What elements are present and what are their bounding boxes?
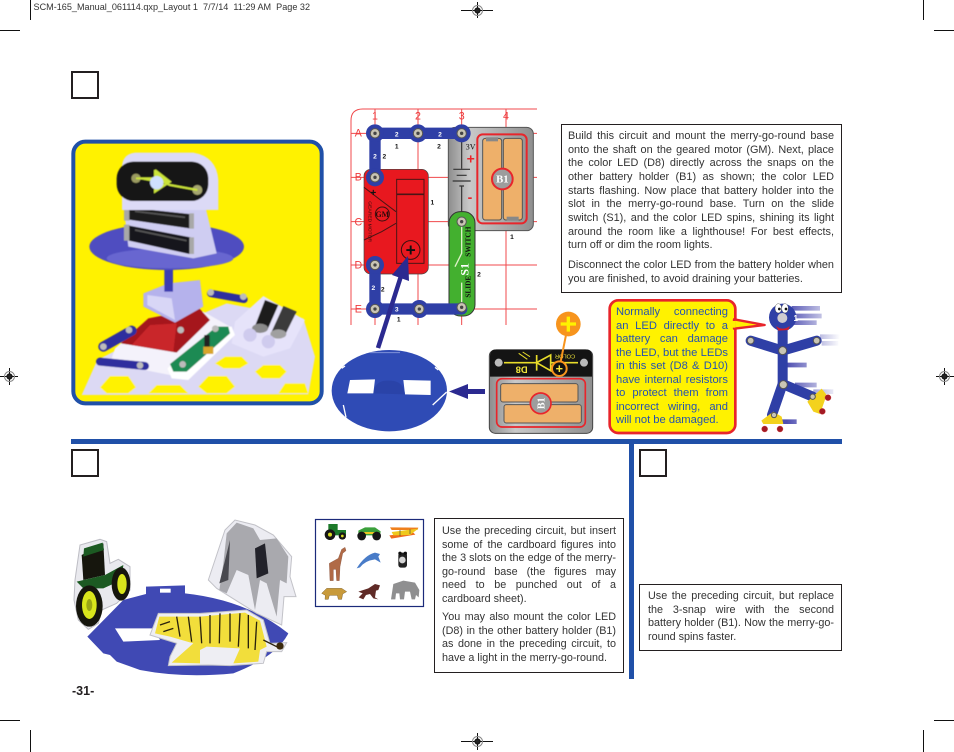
merry-go-round with figures photo bbox=[74, 520, 296, 675]
grid labels: 3 bbox=[459, 110, 465, 122]
grid bbox=[351, 109, 537, 325]
circuit diagram bbox=[351, 109, 537, 325]
grid labels: C bbox=[354, 216, 362, 228]
blue snap wires bbox=[100, 293, 244, 366]
geared motor GM: GM bbox=[375, 210, 390, 219]
callout text: LED note: have internal resistors bbox=[616, 374, 728, 386]
paragraph: insert figures: need to be punched out of a bbox=[442, 579, 616, 591]
LED module bbox=[122, 153, 218, 210]
biplane bbox=[389, 527, 418, 539]
blue base bbox=[87, 585, 288, 675]
callout text: LED note bbox=[616, 306, 728, 426]
paragraph: color LED option: have a light in the merry-go-round. bbox=[442, 652, 607, 664]
paragraph: build steps: switch (S1), and the color LED spins, shining its light bbox=[568, 212, 834, 224]
white snap base bbox=[110, 312, 230, 375]
slide switch S1 bbox=[449, 212, 475, 316]
wire and part numbers: 1 bbox=[395, 144, 399, 151]
wire and part numbers: 2 bbox=[395, 132, 399, 139]
LED on battery holder module: + bbox=[556, 362, 563, 376]
snaps bbox=[366, 124, 471, 318]
grid labels: 1 bbox=[372, 110, 378, 122]
mascot: Snappy: 1 bbox=[793, 314, 798, 323]
grid labels: 4 bbox=[503, 110, 509, 122]
paragraph: replace wire: round spins faster. bbox=[648, 631, 736, 643]
paragraph: color LED option: as done in the preceding circuit, to bbox=[442, 638, 616, 650]
paragraph: build steps: Build this circuit and mount the merry-go-round base bbox=[568, 130, 834, 142]
panel: assembled circuit photo bbox=[73, 142, 322, 403]
arrow: motor shaft to disc bbox=[378, 256, 409, 348]
callout text: LED note: to protect them from bbox=[616, 387, 728, 399]
text box: cardboard figures bbox=[434, 518, 624, 673]
shaft bbox=[164, 268, 173, 292]
wire and part numbers: 2 bbox=[382, 153, 386, 160]
top battery holder bbox=[122, 195, 217, 258]
panda bear bbox=[398, 552, 407, 568]
thumbnail: cardboard figures sheet bbox=[316, 520, 424, 606]
horse bbox=[358, 584, 380, 599]
section rule bbox=[71, 439, 842, 444]
page number: -31- bbox=[72, 684, 94, 698]
column divider bbox=[629, 444, 634, 679]
LED on battery holder module: B1 bbox=[536, 398, 547, 409]
geared motor GM bbox=[364, 169, 428, 274]
tiger figure bbox=[150, 610, 287, 666]
callout pointer and bubble bbox=[610, 300, 765, 433]
green slide switch bbox=[167, 327, 235, 380]
slide switch S1: SWITCH bbox=[464, 226, 473, 257]
callout text: LED note: an LED directly to a bbox=[616, 320, 728, 332]
paragraph: insert figures: the 3 slots on the edge of the merry- bbox=[442, 552, 616, 564]
geared motor GM: + bbox=[406, 240, 416, 260]
merry-go-round disc bbox=[89, 223, 244, 270]
wire and part numbers: 2 bbox=[437, 144, 441, 151]
experiment number box 1 bbox=[71, 71, 99, 99]
wire and part numbers: 2 bbox=[477, 272, 481, 279]
grid labels: D bbox=[354, 260, 362, 272]
paragraph: color LED option bbox=[442, 611, 616, 664]
small elephant bbox=[391, 581, 419, 599]
callout text: LED note: Normally connecting bbox=[616, 306, 728, 318]
paragraph: replace wire bbox=[648, 590, 834, 643]
callout text: LED note: the LED, but the LEDs bbox=[616, 346, 728, 358]
wire and part numbers: 2 bbox=[438, 132, 442, 139]
paragraph: build steps: onto the shaft on the geared motor (GM). Next, place bbox=[568, 144, 834, 156]
battery holder B1 bbox=[448, 127, 533, 231]
battery holder B1: - bbox=[468, 189, 473, 205]
paragraph: insert figures bbox=[442, 525, 616, 604]
paragraph: disconnect note: you are finished, to avoid draining your batteries. bbox=[568, 273, 803, 285]
wire and part numbers: 2 bbox=[373, 153, 377, 160]
hexagon base grid bbox=[82, 303, 315, 395]
snap wires bbox=[375, 133, 462, 309]
paragraph: insert figures: Use the preceding circuit, but insert bbox=[442, 525, 616, 537]
paragraph: build steps: turn off or dim the room lights. bbox=[568, 239, 712, 251]
grid labels: E bbox=[355, 304, 362, 316]
callout text: LED note: in this set (D8 & D10) bbox=[616, 360, 728, 372]
grid labels: 2 bbox=[415, 110, 421, 122]
paragraph: insert figures: some of the cardboard figures into bbox=[442, 538, 616, 550]
tractor figure bbox=[74, 539, 130, 629]
LED on battery holder module: COLOR bbox=[555, 352, 575, 358]
red geared motor bbox=[121, 308, 210, 353]
right battery holder bbox=[232, 296, 305, 357]
LED on battery holder module bbox=[489, 312, 593, 433]
gear box bbox=[143, 280, 203, 323]
wire and part numbers: 1 bbox=[430, 200, 434, 207]
paragraph: disconnect note: Disconnect the color LED from the battery holder when bbox=[568, 259, 834, 271]
mascot: Snappy bbox=[747, 304, 840, 432]
paragraph: color LED option: (D8) in the other battery holder (B1) bbox=[442, 624, 616, 636]
wire and part numbers: 3 bbox=[395, 306, 399, 313]
battery holder B1: 3V bbox=[466, 142, 476, 151]
wire and part numbers: 1 bbox=[397, 316, 401, 323]
callout text: LED note: incorrect wiring, and bbox=[616, 400, 728, 412]
battery holder B1: + bbox=[467, 150, 475, 166]
wire and part numbers: 2 bbox=[371, 285, 375, 292]
small tiger bbox=[322, 588, 347, 599]
paragraph: replace wire: battery holder (B1). Now the merry-go- bbox=[648, 617, 834, 629]
elephant figure bbox=[208, 520, 296, 625]
LED on battery holder module: D8 bbox=[516, 364, 528, 374]
text box: faster variation bbox=[639, 584, 842, 651]
paragraph: disconnect note bbox=[568, 259, 834, 285]
paragraph: build steps: slot in the merry-go-round base. Turn on the slide bbox=[568, 198, 834, 210]
geared motor GM: GEARED MOTOR bbox=[366, 201, 372, 243]
grid labels: A bbox=[355, 128, 363, 140]
giraffe bbox=[329, 547, 346, 581]
paragraph: build steps: other battery holder (B1) as shown; the color LED bbox=[568, 171, 834, 183]
paragraph: replace wire: the 3-snap wire with the second bbox=[648, 604, 834, 616]
paragraph: insert figures: cardboard sheet). bbox=[442, 592, 527, 604]
slide switch S1: SLIDE bbox=[464, 276, 473, 298]
wire and part numbers: 2 bbox=[381, 287, 385, 294]
print header slug: SCM-165_Manual_061114.qxp_Layout 1 7/7/14 11:29 AM Page 32 bbox=[34, 2, 310, 12]
arrow: module to disc bbox=[449, 384, 485, 399]
tractor bbox=[325, 524, 346, 540]
callout text: LED note: battery can damage bbox=[616, 333, 728, 345]
geared motor GM: + bbox=[370, 188, 376, 199]
paragraph: insert figures: go-round base (the figures may bbox=[442, 566, 616, 578]
wire and part numbers: 1 bbox=[510, 234, 514, 241]
experiment number box 3 bbox=[639, 449, 667, 477]
grid labels: B bbox=[355, 172, 362, 184]
text box: build instructions bbox=[561, 124, 842, 293]
battery holder B1: B1 bbox=[496, 175, 509, 186]
paragraph: build steps bbox=[568, 130, 834, 251]
grid labels bbox=[354, 110, 509, 316]
paragraph: replace wire: Use the preceding circuit, but replace bbox=[648, 590, 834, 602]
paragraph: build steps: starts flashing. Now place that battery holder into the bbox=[568, 185, 834, 197]
dolphin bbox=[357, 553, 381, 568]
paragraph: build steps: the color LED (D8) directly across the snaps on the bbox=[568, 157, 834, 169]
paragraph: color LED option: You may also mount the color LED bbox=[442, 611, 616, 623]
paragraph: build steps: around the room like a lighthouse! For best effects, bbox=[568, 226, 834, 238]
merry-go-round base disc bbox=[332, 350, 447, 431]
experiment number box 2 bbox=[71, 449, 99, 477]
slide switch S1: S1 bbox=[457, 263, 471, 276]
callout text: LED note: will not be damaged. bbox=[616, 414, 719, 426]
wire and part numbers bbox=[371, 132, 514, 323]
monster truck bbox=[357, 527, 381, 540]
